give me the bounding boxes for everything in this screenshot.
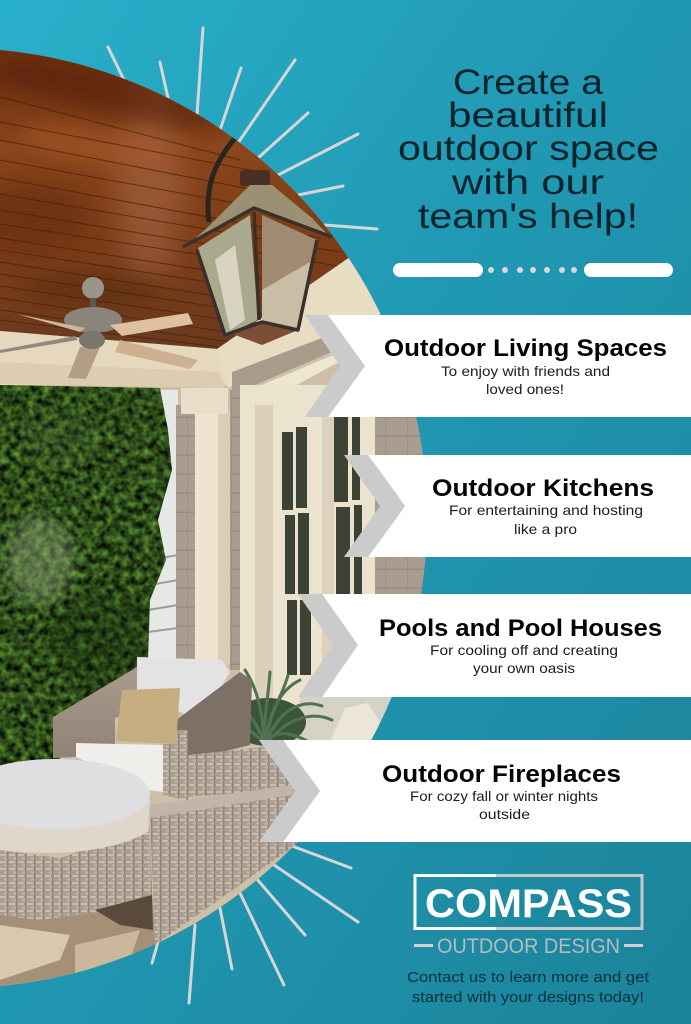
ribbon: Outdoor Kitchens: For entertaining and hosting <box>449 502 643 518</box>
ribbon: Outdoor Living Spaces <box>305 315 691 417</box>
photo: patio behind plant <box>300 697 392 740</box>
ribbon: Pools and Pool Houses: Pools and Pool Houses <box>379 615 662 642</box>
ribbon: Outdoor Kitchens: like a pro <box>514 521 577 537</box>
heading: team's help! <box>418 197 638 236</box>
circular porch photo <box>0 0 440 1000</box>
photo: wood ceiling <box>0 50 348 349</box>
photo: shingled walls <box>176 390 432 670</box>
ribbon: Outdoor Kitchens: Outdoor Kitchens <box>432 475 654 502</box>
photo: cream beams <box>0 258 380 390</box>
ribbon: Outdoor Fireplaces: Outdoor Fireplaces <box>382 761 621 788</box>
photo: stone patio floor <box>0 893 156 995</box>
photo: neighbouring house seen behind ivy <box>148 390 178 658</box>
ribbon: Outdoor Living Spaces: To enjoy with friends and <box>441 363 610 379</box>
photo: wicker armchair <box>53 657 252 800</box>
heading: Create a <box>453 63 604 102</box>
contact call to action: started with your designs today! <box>412 989 644 1006</box>
ribbon: Outdoor Living Spaces: loved ones! <box>486 381 564 397</box>
logo: Compass Outdoor Design <box>414 876 643 958</box>
sunburst rays bottom <box>152 846 358 1003</box>
ribbon: Pools and Pool Houses: For cooling off and creating <box>430 642 618 658</box>
contact call to action: Contact us to learn more and get <box>407 969 650 986</box>
logo: Compass Outdoor Design: OUTDOOR DESIGN <box>437 935 620 958</box>
photo: round ottoman <box>0 759 152 920</box>
ribbon: Pools and Pool Houses: your own oasis <box>473 660 575 676</box>
contact call to action <box>407 969 650 1006</box>
photo: foreground wicker chair <box>150 745 296 945</box>
heading: outdoor space <box>398 129 659 168</box>
heading <box>398 63 659 236</box>
photo: white outdoor pillow <box>330 703 382 742</box>
photo: hanging lantern <box>183 137 332 345</box>
sunburst rays top <box>108 28 377 229</box>
photo: ceiling fan <box>0 277 198 379</box>
ribbon: Outdoor Fireplaces <box>259 740 691 842</box>
photo: porch column <box>181 388 230 665</box>
photo: ivy wall <box>0 385 172 766</box>
ribbon: Outdoor Fireplaces: outside <box>479 806 530 822</box>
heading: beautiful <box>448 96 608 135</box>
ribbon: Outdoor Kitchens <box>344 455 691 557</box>
divider pills and dots <box>393 263 673 277</box>
photo: wall base <box>0 0 440 1000</box>
photo: french doors <box>240 385 375 705</box>
ribbon: Outdoor Fireplaces: For cozy fall or winter nights <box>410 788 598 804</box>
heading: with our <box>451 163 604 202</box>
ribbon: Pools and Pool Houses <box>298 594 691 697</box>
photo: planter fern <box>243 668 334 746</box>
ribbon: Outdoor Living Spaces: Outdoor Living Spaces <box>384 335 667 362</box>
logo: Compass Outdoor Design: COMPASS <box>425 882 632 926</box>
